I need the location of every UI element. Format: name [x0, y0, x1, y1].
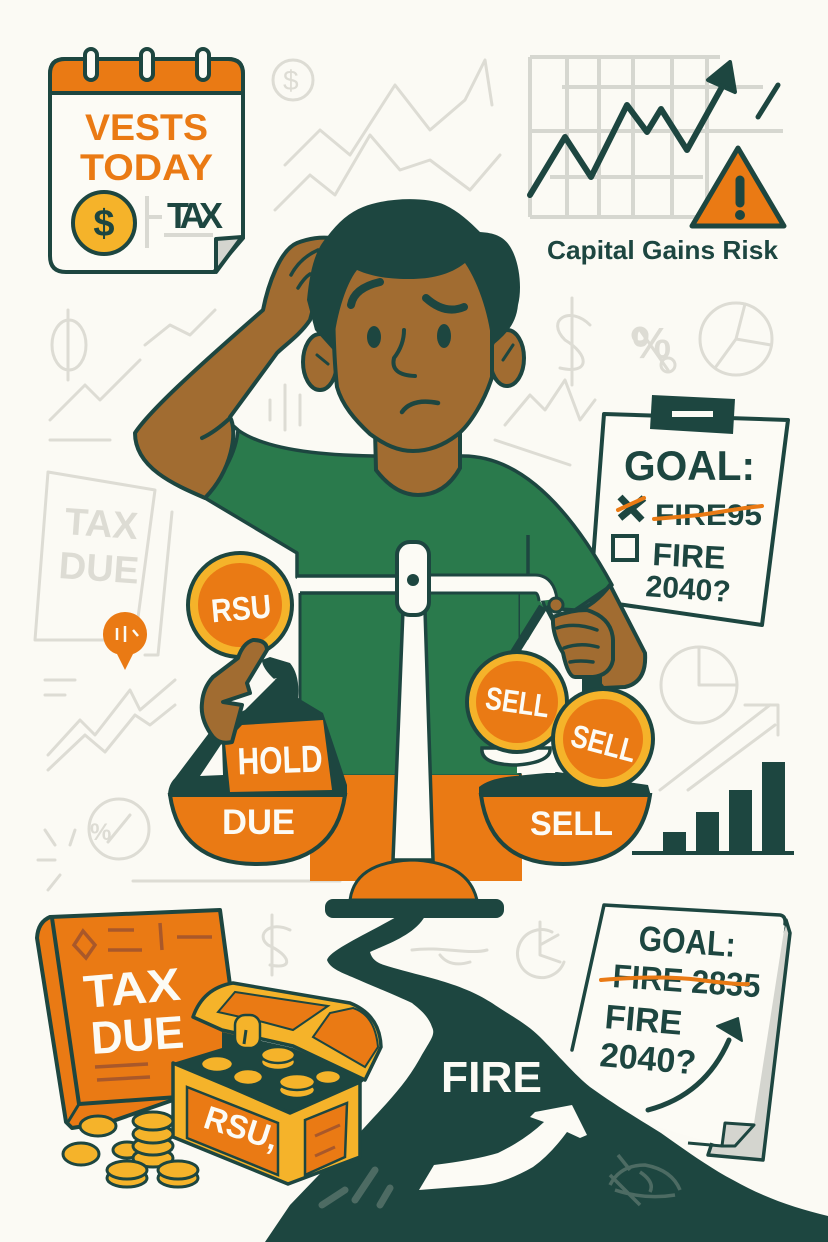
goal note with arrow: 2040?: [598, 1036, 698, 1082]
goal note with arrow: [572, 905, 790, 1160]
right hand: [549, 598, 613, 677]
neck: [375, 430, 460, 495]
line chart with warning: capital gains risk: [530, 57, 784, 265]
left hand: [202, 640, 267, 743]
goal note with arrow: FIRE: [603, 998, 684, 1043]
clipboard: goal: [590, 395, 788, 625]
hold tag: HOLD: [237, 739, 323, 783]
scale base: [350, 860, 477, 900]
cup under sell coin: [517, 758, 558, 773]
bar chart: [632, 762, 794, 855]
calendar icon: vests today: [50, 49, 243, 272]
line chart with warning: capital gains risk: Capital Gains Risk: [547, 235, 779, 265]
hold tag: [225, 720, 332, 792]
right pan: SELL: [530, 805, 613, 843]
sell coins: SELL: [567, 717, 640, 769]
orange alert badge: [103, 612, 147, 670]
faint tax due text: DUE: [57, 545, 140, 593]
calendar icon: vests today: TAX: [167, 195, 223, 236]
road to fire: FIRE: [441, 1053, 542, 1102]
scale beam: [297, 577, 397, 593]
sell coins: SELL: [483, 680, 552, 724]
hair: [307, 199, 520, 350]
facial features: [351, 282, 464, 310]
background doodles: faint finance sketches: [35, 60, 778, 978]
raised arm: [135, 238, 332, 498]
right forearm: [575, 585, 645, 688]
tax due book: DUE: [89, 1006, 185, 1064]
ears: [303, 330, 524, 390]
shirt: [205, 423, 612, 776]
rsu coin: RSU: [210, 587, 273, 629]
clipboard: goal: GOAL:: [624, 442, 755, 489]
goal note with arrow: GOAL:: [637, 919, 737, 965]
right pan: [479, 772, 651, 864]
chest box: [173, 1063, 360, 1184]
tax due book: TAX: [81, 958, 183, 1018]
calendar icon: vests today: TODAY: [80, 147, 213, 188]
person with scale: [135, 199, 653, 918]
trousers: [310, 774, 522, 881]
left pan: DUE: [222, 803, 295, 842]
chest interior: [173, 1032, 365, 1113]
left pan straps: [168, 657, 347, 796]
loose gold coins: [63, 1112, 198, 1187]
road to fire: [265, 916, 828, 1242]
rsu coin: [188, 553, 292, 657]
faint symbols: [90, 65, 671, 846]
faint symbols: %: [632, 319, 671, 368]
tax due book: [37, 910, 240, 1128]
faint tax due text: TAX: [63, 501, 140, 548]
chest lid: [193, 983, 381, 1080]
clipboard: goal: FIRE: [652, 536, 726, 576]
scale post: [393, 610, 433, 860]
calendar icon: vests today: VESTS: [85, 107, 208, 148]
clipboard: goal: FIRE95: [655, 499, 762, 532]
calendar icon: vests today: $: [93, 203, 115, 245]
faint tax due text: [57, 501, 140, 593]
faint symbols: $: [283, 65, 299, 96]
faint symbols: %: [90, 819, 111, 846]
right pan straps: [513, 607, 543, 655]
left pan: [170, 795, 345, 864]
treasure chest with rsu coins: [173, 983, 381, 1184]
clipboard: goal: 2040?: [645, 570, 732, 609]
treasure chest with rsu coins: RSU,: [200, 1098, 284, 1157]
face: [333, 250, 492, 451]
goal note with arrow: FIRE 2835: [612, 957, 762, 1004]
sell coins: [467, 652, 653, 789]
